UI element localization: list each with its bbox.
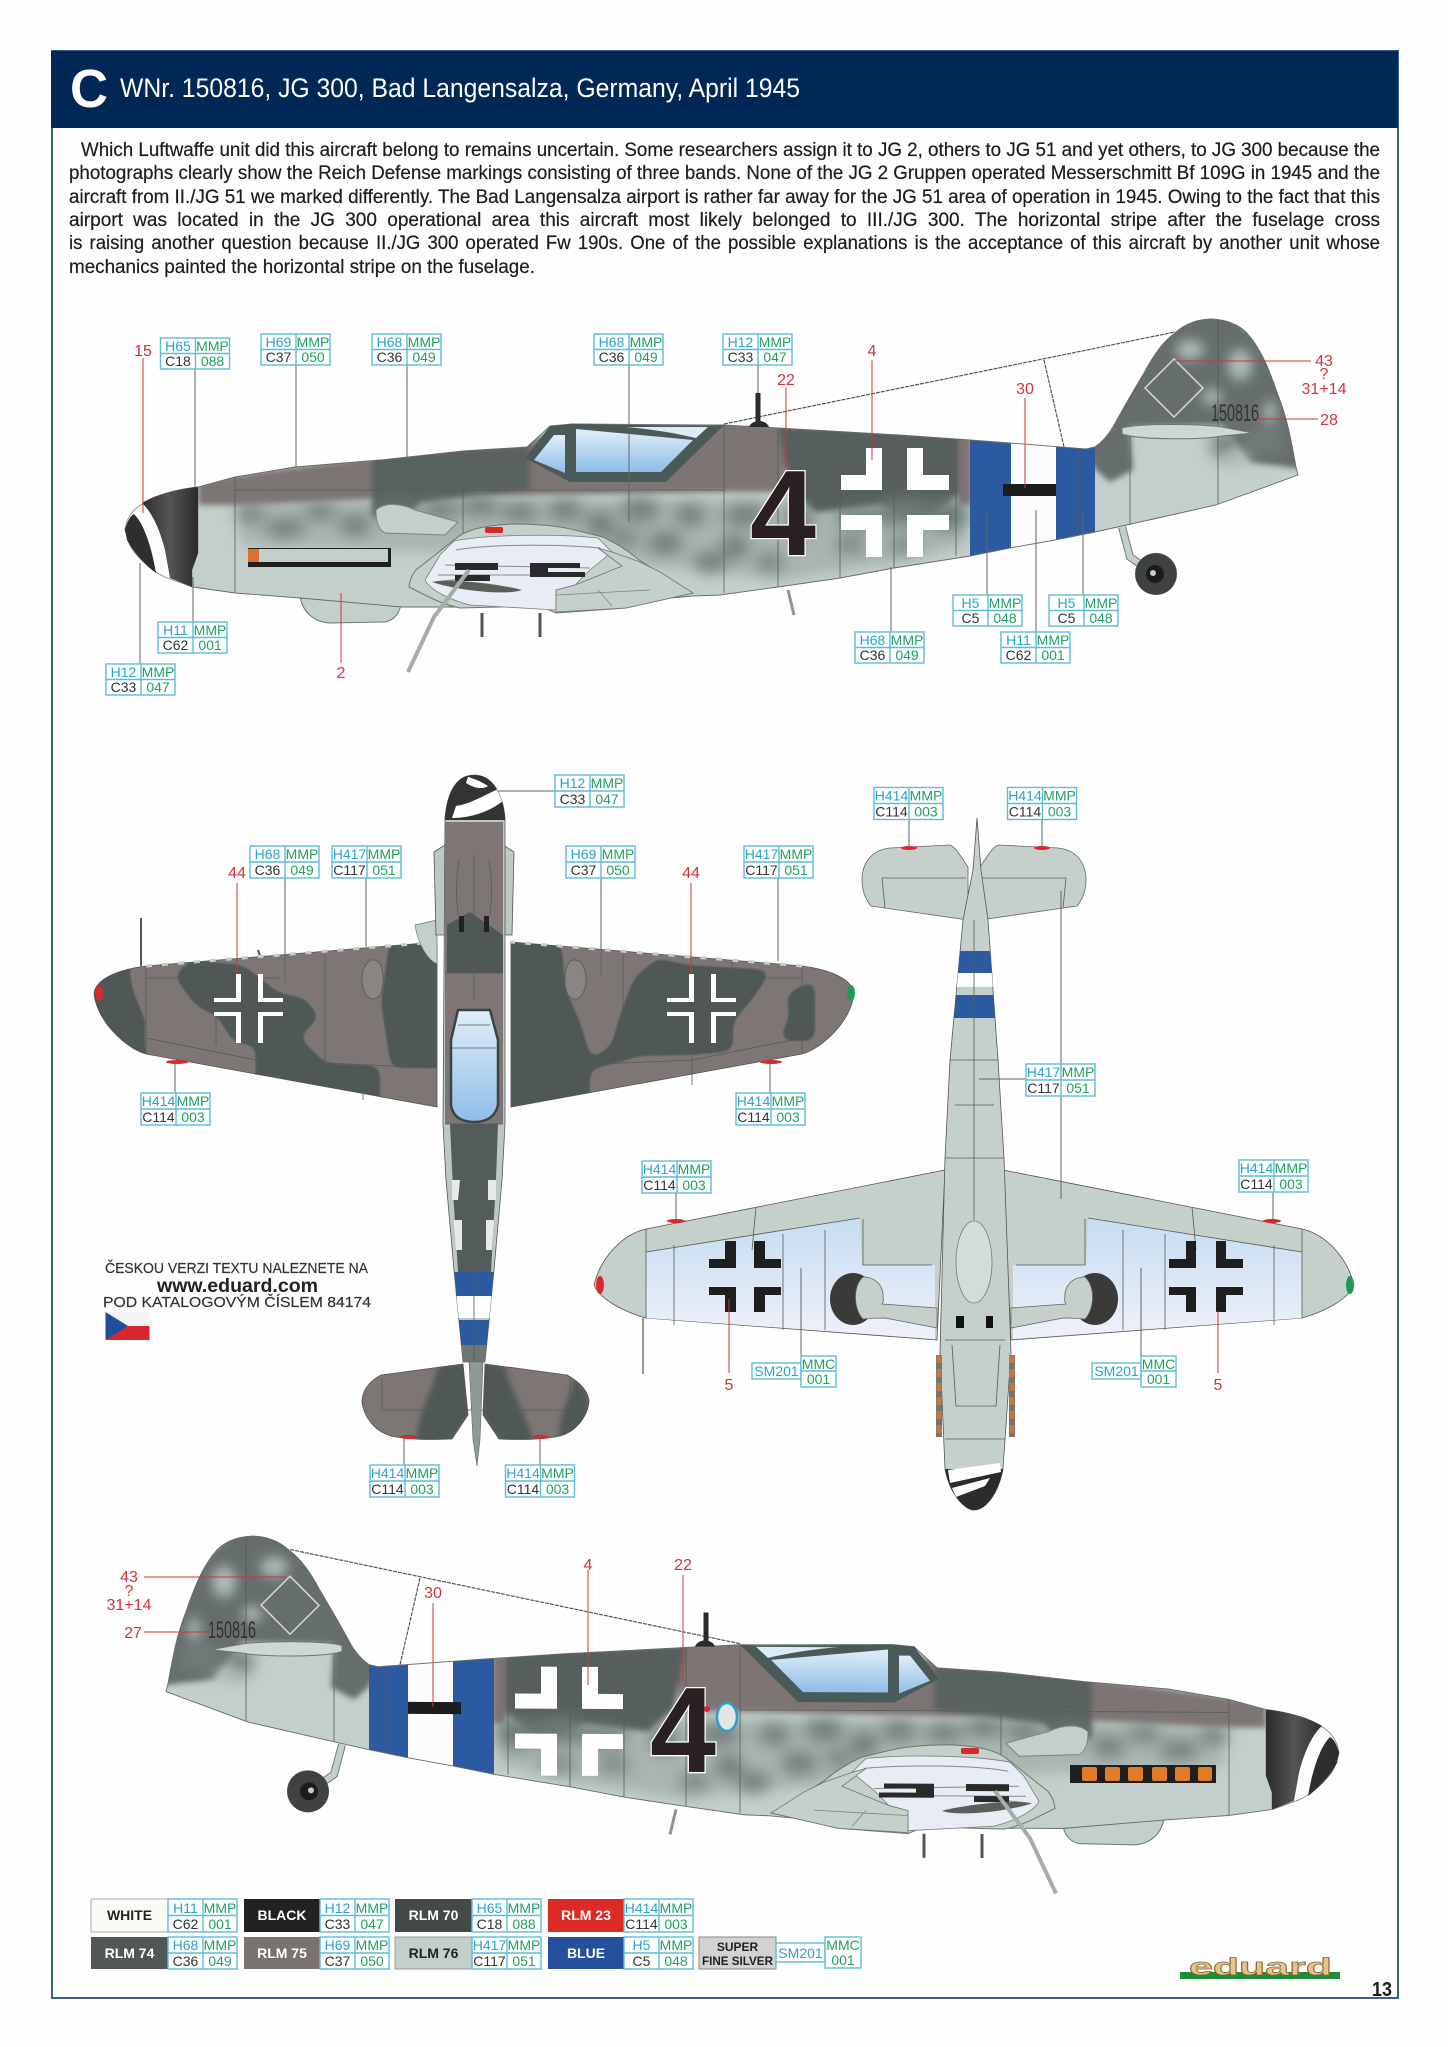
colour legend	[91, 1899, 861, 1969]
paint label H68: H68	[255, 846, 281, 862]
paint label H5: C5	[962, 610, 980, 626]
aircraft: right side view	[125, 300, 1310, 672]
blue underside panels	[646, 1218, 935, 1339]
paint label H414	[370, 1465, 439, 1497]
paint label H414: H414	[875, 788, 908, 804]
swatch RLM 76: C117	[473, 1953, 506, 1969]
swatch RLM 75	[244, 1937, 389, 1969]
radiator flaps	[956, 1316, 993, 1328]
swatch BLACK: C33	[325, 1916, 351, 1932]
paint label H12: MMP	[759, 334, 791, 350]
paint label SM201	[1092, 1356, 1176, 1387]
paint label SM201: MMC	[802, 1356, 835, 1372]
aircraft: left side view	[154, 1516, 1339, 1895]
paint label H414: H414	[506, 1465, 540, 1481]
paint label H12: C33	[728, 349, 754, 365]
paint label H68: MMP	[630, 334, 662, 350]
swatch RLM 74	[91, 1937, 237, 1969]
swatch BLACK: H12	[325, 1900, 351, 1916]
paint label H414: 003	[546, 1481, 569, 1497]
paint label H414	[874, 788, 943, 820]
fin	[469, 1362, 483, 1466]
paint label H417: C117	[1027, 1080, 1060, 1096]
wing crosses	[214, 974, 283, 1043]
paint label H414: 003	[1279, 1176, 1303, 1192]
paint label H414: 003	[181, 1109, 205, 1125]
swatch WHITE	[91, 1899, 237, 1932]
paint label H417	[332, 846, 401, 878]
paint label H68: 049	[412, 349, 436, 365]
paint label H414: 003	[410, 1481, 434, 1497]
paint label H5	[1049, 595, 1118, 626]
swatch RLM 23: MMP	[660, 1900, 692, 1916]
fuselage number 4: 4	[750, 445, 816, 581]
tailplane	[362, 1364, 590, 1440]
red callouts: left side view	[107, 1557, 692, 1707]
paint label H68: C36	[377, 349, 403, 365]
fin	[972, 818, 982, 920]
callouts: red numbers side view: 4	[868, 343, 877, 360]
paint label H414	[141, 1093, 210, 1125]
werknummer: 150816	[1211, 400, 1259, 427]
paint label H11: 001	[1041, 647, 1065, 663]
paint label H414: MMP	[541, 1465, 574, 1481]
paint label H417: MMP	[780, 846, 812, 862]
paint label H414: MMP	[910, 788, 942, 804]
paint label H65: C18	[165, 353, 191, 369]
callouts: red numbers side view: 28	[1320, 412, 1338, 429]
paint label H414: MMP	[678, 1161, 710, 1177]
paint label H69: C37	[266, 349, 292, 365]
swatch RLM 75: RLM 75	[257, 1945, 307, 1961]
fuselage underside	[940, 818, 1011, 1510]
swatch BLUE: MMP	[660, 1937, 692, 1953]
Czech version note: www.eduard.com	[156, 1276, 318, 1297]
callouts: red numbers side view	[134, 343, 1347, 682]
paint label H417: 051	[784, 862, 808, 878]
paint label H414: 003	[776, 1109, 800, 1125]
paint label H11: MMP	[194, 622, 226, 638]
paint label H69: MMP	[297, 334, 329, 350]
paint label H5: 048	[993, 610, 1017, 626]
swatch RLM 23	[548, 1899, 693, 1932]
paint label H69	[261, 334, 330, 365]
red callouts: top view	[228, 865, 700, 974]
paint label H414: 003	[914, 804, 938, 820]
Czech version note: ČESKOU VERZI TEXTU NALEZNETE NA	[105, 1260, 368, 1277]
swatch SUPER FINE SILVER: MMC	[826, 1937, 860, 1953]
paint label H5	[953, 595, 1022, 626]
swatch BLACK: MMP	[356, 1900, 388, 1916]
swatch WHITE: H11	[173, 1900, 198, 1916]
swatch RLM 70: MMP	[508, 1900, 540, 1916]
paint label H11	[158, 622, 227, 653]
paint label H417: C117	[333, 862, 366, 878]
swatch RLM 70: 088	[512, 1916, 536, 1932]
red callouts: underside: 5	[1214, 1377, 1223, 1394]
paint label H417: H417	[745, 846, 778, 862]
paint label H5: C5	[1058, 610, 1076, 626]
intro text	[69, 140, 1380, 278]
swatch RLM 75: C37	[325, 1953, 351, 1969]
paint label H5: 048	[1089, 610, 1113, 626]
swatch RLM 75: MMP	[356, 1937, 388, 1953]
paint label H65: MMP	[196, 338, 229, 354]
paint label H69: MMP	[602, 846, 634, 862]
red callouts: underside: 5	[725, 1377, 734, 1394]
paint label H12: H12	[728, 334, 754, 350]
swatch SUPER FINE SILVER	[699, 1937, 861, 1969]
paint label H11: C62	[163, 637, 189, 653]
paint label SM201: MMC	[1142, 1356, 1175, 1372]
paint label H417: H417	[1027, 1064, 1060, 1080]
paint label H414	[506, 1465, 574, 1497]
blue ring	[704, 1703, 737, 1731]
leader lines: top view	[175, 791, 778, 1465]
red callouts: left side view: 43	[120, 1569, 138, 1586]
paint label H414	[1239, 1160, 1308, 1192]
paint label H5: H5	[1058, 595, 1076, 611]
paint label H414: H414	[1240, 1160, 1273, 1176]
callouts: red numbers side view: 43	[1315, 353, 1333, 370]
swatch BLACK: BLACK	[258, 1907, 306, 1923]
red callouts: top view: 44	[228, 865, 246, 882]
paint label H12: 047	[595, 791, 619, 807]
swatch RLM 23: RLM 23	[561, 1907, 611, 1923]
swatch RLM 70: H65	[477, 1900, 503, 1916]
icon: Czech flag	[106, 1312, 150, 1340]
paint label H12: C33	[560, 791, 586, 807]
swatch RLM 74: 049	[208, 1953, 232, 1969]
paint label H414: MMP	[1275, 1160, 1307, 1176]
swatch RLM 23: H414	[625, 1900, 658, 1916]
aircraft: underside view	[594, 818, 1354, 1514]
paint label H414: 003	[682, 1177, 706, 1193]
swatch RLM 74: MMP	[204, 1937, 236, 1953]
paint label H414	[642, 1161, 711, 1193]
intro text: photographs clearly show the Reich Defense markings consisting of three bands. None of the JG 2 Gruppen operated Messerschmitt Bf 109G in 1945 and the	[69, 163, 1380, 184]
paint label H65: H65	[165, 338, 191, 354]
exhaust stubs	[939, 1355, 1012, 1437]
paint label H69: C37	[571, 862, 597, 878]
paint label H68: H68	[377, 334, 403, 350]
paint label H12: 047	[763, 349, 787, 365]
paint label H414: C114	[1009, 804, 1041, 820]
swatch BLUE: C5	[633, 1953, 651, 1969]
red callouts: underside	[725, 1299, 1223, 1394]
paint label H12: 047	[146, 679, 170, 695]
paint label H65: 088	[201, 353, 224, 369]
paint label H414: C114	[142, 1109, 175, 1125]
paint label H11: C62	[1006, 647, 1032, 663]
paint label H68	[250, 846, 319, 878]
leader lines: underside	[676, 819, 1273, 1356]
paint label H68	[594, 334, 663, 365]
paint label H69: 050	[606, 862, 630, 878]
page number: 13	[1372, 1979, 1392, 2001]
paint label H11: H11	[1006, 632, 1031, 648]
paint label SM201: SM201	[1094, 1363, 1139, 1379]
callouts: red numbers side view: 30	[1016, 381, 1034, 398]
paint label H417: 051	[1066, 1080, 1090, 1096]
paint label H12: H12	[560, 775, 586, 791]
paint label H414: H414	[142, 1093, 175, 1109]
swatch RLM 75: 050	[360, 1953, 384, 1969]
underside crosses	[709, 1241, 781, 1312]
starboard wheel and well	[1011, 1273, 1118, 1328]
fuselage number 4: 4	[650, 1662, 716, 1798]
tailplane underside	[862, 845, 1086, 920]
callouts: red numbers side view: ?	[1320, 366, 1329, 383]
paint label SM201	[752, 1356, 836, 1387]
swatch BLACK: 047	[360, 1916, 384, 1932]
red callouts: left side view: ?	[125, 1583, 134, 1600]
starboard wing	[510, 940, 855, 1108]
wing tip lights	[596, 1219, 1354, 1294]
paint label H68: C36	[860, 647, 886, 663]
intro text: Which Luftwaffe unit did this aircraft belong to remains uncertain. Some researchers assign it to JG 2, others to JG 51 and yet others, to JG 300 because the	[81, 140, 1380, 161]
paint label H68: MMP	[286, 846, 318, 862]
swatch RLM 76: 051	[512, 1953, 536, 1969]
paint label H12	[555, 775, 624, 807]
paint label H414: H414	[1008, 788, 1042, 804]
swatch WHITE: MMP	[204, 1900, 236, 1916]
header bar: C	[70, 59, 108, 119]
aerial mast	[141, 918, 264, 968]
callouts: red numbers side view: 31+14	[1302, 381, 1347, 398]
swatch RLM 70: RLM 70	[409, 1907, 459, 1923]
swatch BLACK	[244, 1899, 389, 1932]
swatch RLM 70: C18	[477, 1916, 503, 1932]
paint label H414: MMP	[1043, 788, 1076, 804]
swatch BLUE: H5	[633, 1937, 651, 1953]
paint label H68: 049	[634, 349, 658, 365]
swatch RLM 74: H68	[173, 1937, 199, 1953]
aerial under wing	[642, 1318, 644, 1374]
paint label H11: 001	[198, 637, 222, 653]
intro text: airport was located in the JG 300 operational area this aircraft most likely belonged to III./JG 300. The horizontal stripe after the fuselage cross	[69, 210, 1380, 231]
paint label H5: H5	[962, 595, 980, 611]
swatch RLM 76: H417	[473, 1937, 506, 1953]
swatch BLUE	[548, 1937, 693, 1969]
werknummer: 150816	[208, 1617, 256, 1644]
paint label H11: H11	[163, 622, 188, 638]
paint label H417	[744, 846, 813, 878]
callouts: red numbers side view: 15	[134, 343, 152, 360]
port underside wing	[594, 1170, 945, 1340]
header bar	[51, 51, 1398, 128]
paint label H68: C36	[255, 862, 281, 878]
exhaust cover	[248, 548, 391, 567]
paint label H414	[1008, 788, 1076, 820]
swatch RLM 70	[395, 1899, 541, 1932]
cowl blisters	[434, 845, 514, 935]
paint label H414: C114	[643, 1177, 676, 1193]
paint label H414: C114	[371, 1481, 404, 1497]
paint label H69	[566, 846, 635, 878]
intro text: is raising another question because II./JG 300 operated Fw 190s. One of the possible explanations is the acceptance of this aircraft by another unit whose	[69, 233, 1380, 254]
paint label H12: MMP	[142, 664, 174, 680]
paint label H5: MMP	[1085, 595, 1117, 611]
paint label H417: H417	[333, 846, 366, 862]
paint label H68	[855, 632, 924, 663]
paint label H414: MMP	[406, 1465, 438, 1481]
paint label H65	[160, 338, 230, 369]
paint label H414: H414	[643, 1161, 676, 1177]
red callouts: top view: 44	[682, 865, 700, 882]
swatch RLM 23: C114	[625, 1916, 658, 1932]
paint label H68: MMP	[891, 632, 923, 648]
paint label H414	[736, 1093, 805, 1125]
swatch RLM 75: H69	[325, 1937, 351, 1953]
swatch RLM 74: RLM 74	[105, 1945, 155, 1961]
swatch RLM 74: C36	[173, 1953, 199, 1969]
central intake	[956, 1221, 992, 1303]
callouts: red numbers side view: 22	[777, 372, 795, 389]
paint label H414: C114	[507, 1481, 539, 1497]
paint label H417: C117	[745, 862, 778, 878]
title: WNr. 150816, JG 300, Bad Langensalza, Germany, April 1945	[120, 73, 800, 103]
swatch RLM 76: RLM 76	[409, 1945, 459, 1961]
paint label H12: C33	[111, 679, 137, 695]
paint label H417: MMP	[1062, 1064, 1094, 1080]
paint label H68: H68	[599, 334, 625, 350]
red callouts: left side view: 22	[674, 1557, 692, 1574]
swatch SUPER FINE SILVER: FINE SILVER	[702, 1954, 773, 1968]
eduard logo	[1180, 1954, 1340, 1981]
eduard logo: eduard	[1189, 1954, 1332, 1981]
paint label H68: MMP	[408, 334, 440, 350]
paint label SM201: 001	[1147, 1371, 1170, 1387]
intro text: mechanics painted the horizontal stripe on the fuselage.	[69, 257, 535, 278]
swatch RLM 76: MMP	[508, 1937, 540, 1953]
aircraft: top view	[70, 775, 855, 1466]
paint label H414: C114	[737, 1109, 770, 1125]
paint label H417	[1026, 1064, 1095, 1096]
Czech version note: POD KATALOGOVÝM ČÍSLEM 84174	[103, 1294, 371, 1311]
paint label H68: C36	[599, 349, 625, 365]
paint label H417: MMP	[368, 846, 400, 862]
paint label H5: MMP	[989, 595, 1021, 611]
leader lines: side view	[140, 365, 1083, 664]
paint label H12	[723, 334, 792, 365]
paint label H68	[372, 334, 441, 365]
paint label H11	[1001, 632, 1070, 663]
swatch BLUE: BLUE	[567, 1945, 605, 1961]
fuselage	[443, 775, 505, 1362]
swatch RLM 76	[395, 1937, 541, 1969]
red callouts: left side view: 31+14	[107, 1597, 152, 1614]
swatch SUPER FINE SILVER: SUPER	[717, 1940, 759, 1954]
starboard underside wing	[1003, 1170, 1354, 1340]
paint label H414: C114	[1240, 1176, 1273, 1192]
canopy	[451, 1010, 498, 1122]
swatch RLM 23: 003	[664, 1916, 688, 1932]
paint label H417: 051	[372, 862, 396, 878]
paint label SM201: SM201	[754, 1363, 799, 1379]
red callouts: left side view: 30	[424, 1585, 442, 1602]
swatch WHITE: C62	[173, 1916, 199, 1932]
exhaust stubs	[1070, 1765, 1216, 1783]
paint label H12: H12	[111, 664, 137, 680]
red callouts: left side view: 27	[124, 1625, 142, 1642]
paint label H12: MMP	[591, 775, 623, 791]
paint label H68: 049	[290, 862, 314, 878]
intro text: aircraft from II./JG 51 we marked differently. The Bad Langensalza airport is rather far away for the JG 51 area of operation in 1945. Owing to the fact that this	[69, 187, 1380, 208]
swatch WHITE: WHITE	[107, 1907, 152, 1923]
paint label H68: H68	[860, 632, 886, 648]
paint label H12	[106, 664, 175, 695]
paint label H69: H69	[571, 846, 597, 862]
paint label H414: MMP	[772, 1093, 804, 1109]
root fairing	[415, 920, 437, 964]
swatch SUPER FINE SILVER: SM201	[778, 1945, 823, 1961]
red callouts: left side view: 4	[584, 1557, 593, 1574]
paint label H69: H69	[266, 334, 292, 350]
paint label H68: 049	[895, 647, 919, 663]
paint label SM201: 001	[807, 1371, 830, 1387]
port wing	[94, 942, 438, 1108]
paint label H414: C114	[875, 804, 908, 820]
paint label H69: 050	[301, 349, 325, 365]
swatch BLUE: 048	[664, 1953, 688, 1969]
paint label H11: MMP	[1037, 632, 1069, 648]
paint label H414: MMP	[177, 1093, 209, 1109]
paint label H414: 003	[1048, 804, 1071, 820]
paint label H414: H414	[737, 1093, 770, 1109]
Czech version note	[103, 1260, 371, 1340]
paint label H414: H414	[371, 1465, 404, 1481]
swatch SUPER FINE SILVER: 001	[831, 1952, 855, 1968]
swatch WHITE: 001	[208, 1916, 232, 1932]
port wheel and well	[830, 1273, 937, 1328]
callouts: red numbers side view: 2	[337, 665, 346, 682]
